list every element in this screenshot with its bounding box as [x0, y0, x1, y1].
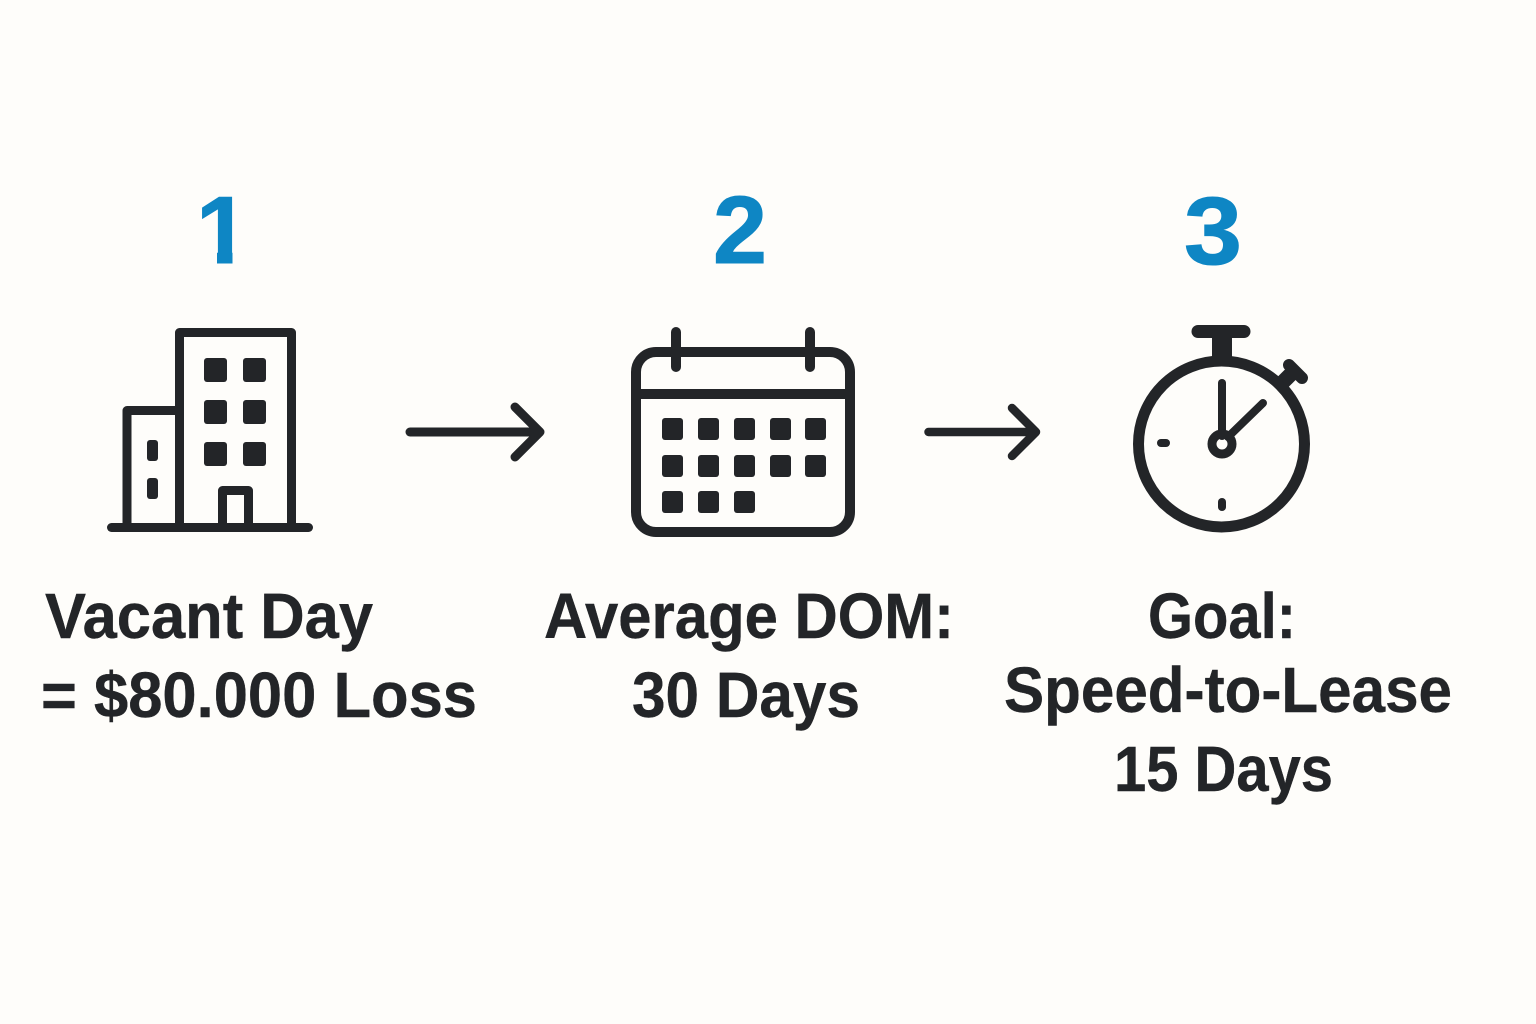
- label: step 3: Goal:: [1148, 580, 1296, 652]
- label: step 3: Speed-to-Lease: [1004, 654, 1452, 726]
- arrow: step 1 to step 2: [410, 407, 540, 457]
- label: step 1: = $80.000 Loss: [41, 659, 477, 731]
- arrow: step 2 to step 3: [928, 408, 1036, 456]
- label: step 2: 30 Days: [632, 659, 860, 731]
- icon: office building: [112, 332, 308, 528]
- icon: calendar: [636, 332, 850, 532]
- step number 1: 1: [196, 177, 249, 284]
- label: step 1: [41, 580, 477, 731]
- label: step 3: [1004, 580, 1452, 805]
- label: step 3: 15 Days: [1114, 733, 1333, 805]
- label: step 2: [544, 580, 954, 731]
- icon: stopwatch: [1138, 332, 1304, 527]
- label: step 1: Vacant Day: [45, 580, 373, 652]
- label: step 2: Average DOM:: [544, 580, 954, 652]
- step number 2: 2: [713, 177, 767, 284]
- step number 3: 3: [1184, 178, 1242, 285]
